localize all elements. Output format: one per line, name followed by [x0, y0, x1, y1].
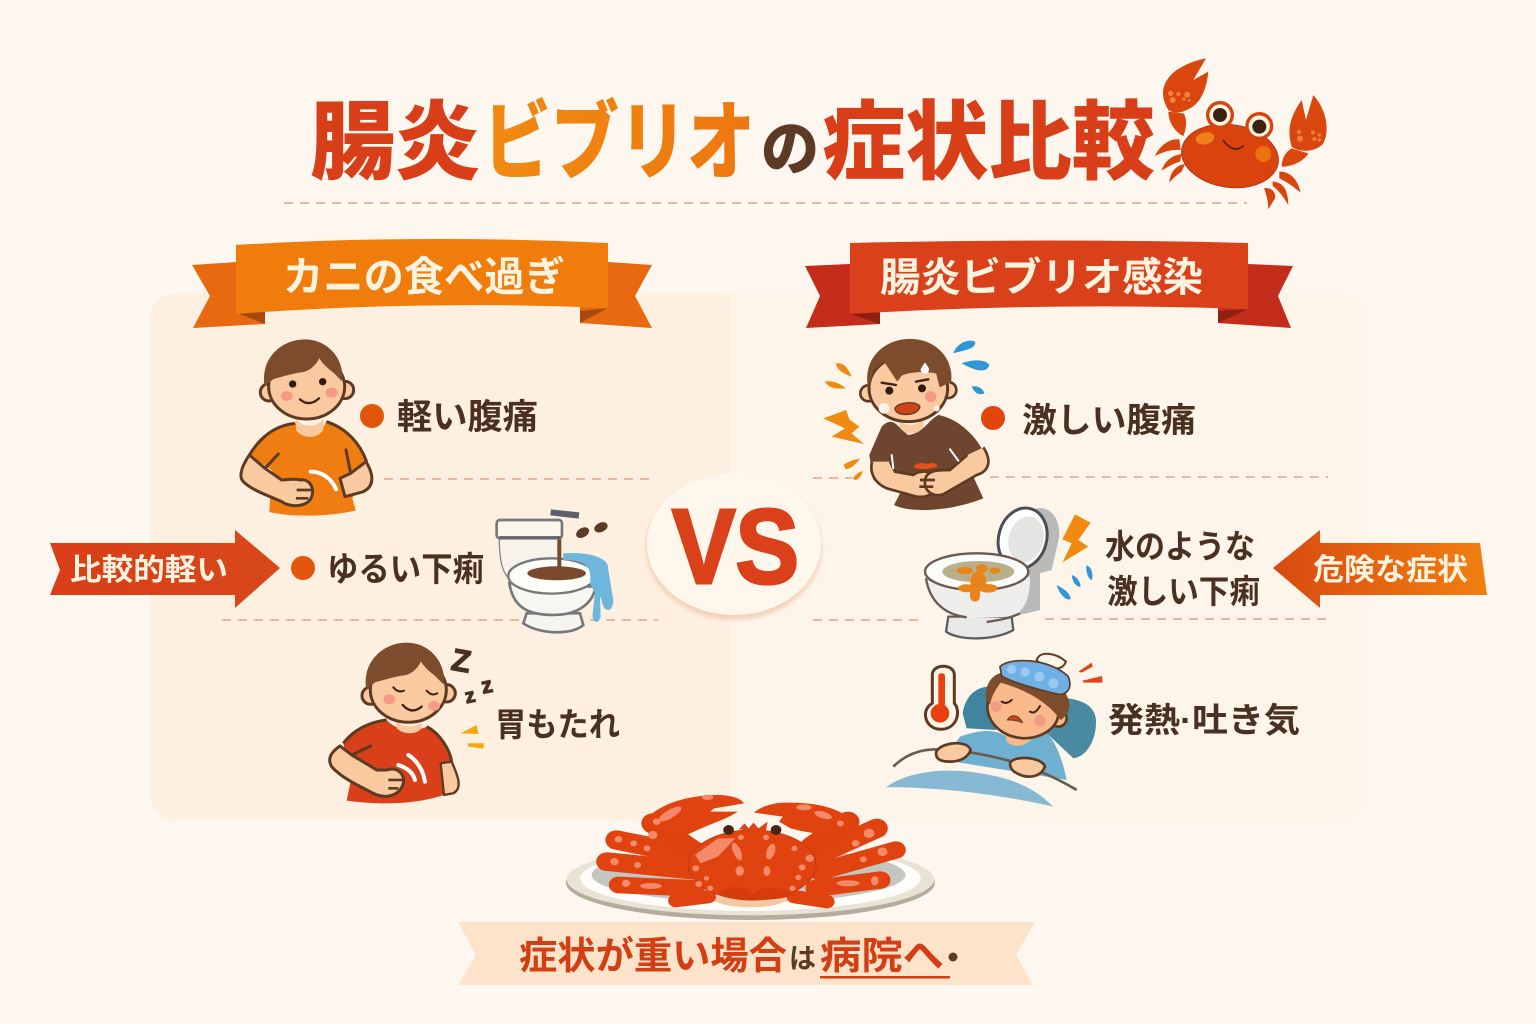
illustration: sick child in bed with thermometer	[886, 654, 1103, 807]
arrow callout: 危険な症状	[1273, 530, 1487, 608]
illustration: child with severe stomach pain	[823, 339, 989, 510]
arrow callout: 比較的軽い: 比較的軽い	[70, 554, 228, 587]
title	[310, 95, 1155, 191]
label: 水のような 激しい下痢: 激しい下痢	[1107, 573, 1260, 610]
arrow callout: 比較的軽い	[50, 530, 280, 608]
ribbon: 症状が重い場合は病院へ: は	[789, 943, 816, 974]
ribbon: 症状が重い場合は病院へ	[458, 922, 1035, 985]
ribbon: 症状が重い場合は病院へ: 病院へ	[820, 936, 944, 978]
illustration: child with mild stomach ache	[241, 340, 372, 515]
title: 腸炎	[310, 95, 480, 191]
bullet and label: ゆるい下痢: ゆるい下痢	[327, 551, 484, 589]
title: の	[761, 116, 819, 183]
icon: toilet with watery diarrhea	[925, 502, 1092, 638]
sleep marks	[449, 642, 495, 708]
arrow callout: 危険な症状: 危険な症状	[1313, 554, 1468, 587]
illustration: crab on a plate	[566, 795, 935, 920]
label: 発熱・吐き気: 発熱·吐き気	[1108, 702, 1300, 740]
badge: VS	[646, 473, 822, 620]
icon: cartoon crab	[1155, 58, 1327, 209]
sleep marks: z	[479, 672, 495, 699]
illustration: child with heavy stomach	[330, 643, 484, 803]
label: 水のような 激しい下痢	[1105, 528, 1260, 610]
title: 症状比較	[822, 95, 1155, 191]
bullet and label: 激しい腹痛: 激しい腹痛	[1022, 402, 1196, 440]
label: 胃もたれ: 胃もたれ	[495, 706, 620, 743]
icon: toilet with loose stool	[497, 509, 613, 632]
sleep marks: z	[463, 685, 477, 708]
banner: 腸炎ビブリオ感染	[805, 240, 1293, 328]
badge: VS: VS	[672, 488, 799, 606]
banner: カニの食べ過ぎ	[192, 239, 652, 328]
sleep marks: Z	[449, 642, 474, 680]
title: ビブリオ	[483, 95, 755, 191]
ribbon: 症状が重い場合は病院へ: 症状が重い場合	[519, 936, 787, 978]
icon: thermometer	[925, 666, 958, 729]
banner: カニの食べ過ぎ: カニの食べ過ぎ	[283, 254, 565, 300]
bullet and label: 軽い腹痛: 軽い腹痛	[397, 398, 538, 437]
panel: comparison background	[150, 293, 1367, 820]
banner: 腸炎ビブリオ感染: 腸炎ビブリオ感染	[880, 256, 1203, 300]
dividers	[222, 203, 1328, 620]
label: 水のような 激しい下痢: 水のような	[1105, 528, 1255, 565]
